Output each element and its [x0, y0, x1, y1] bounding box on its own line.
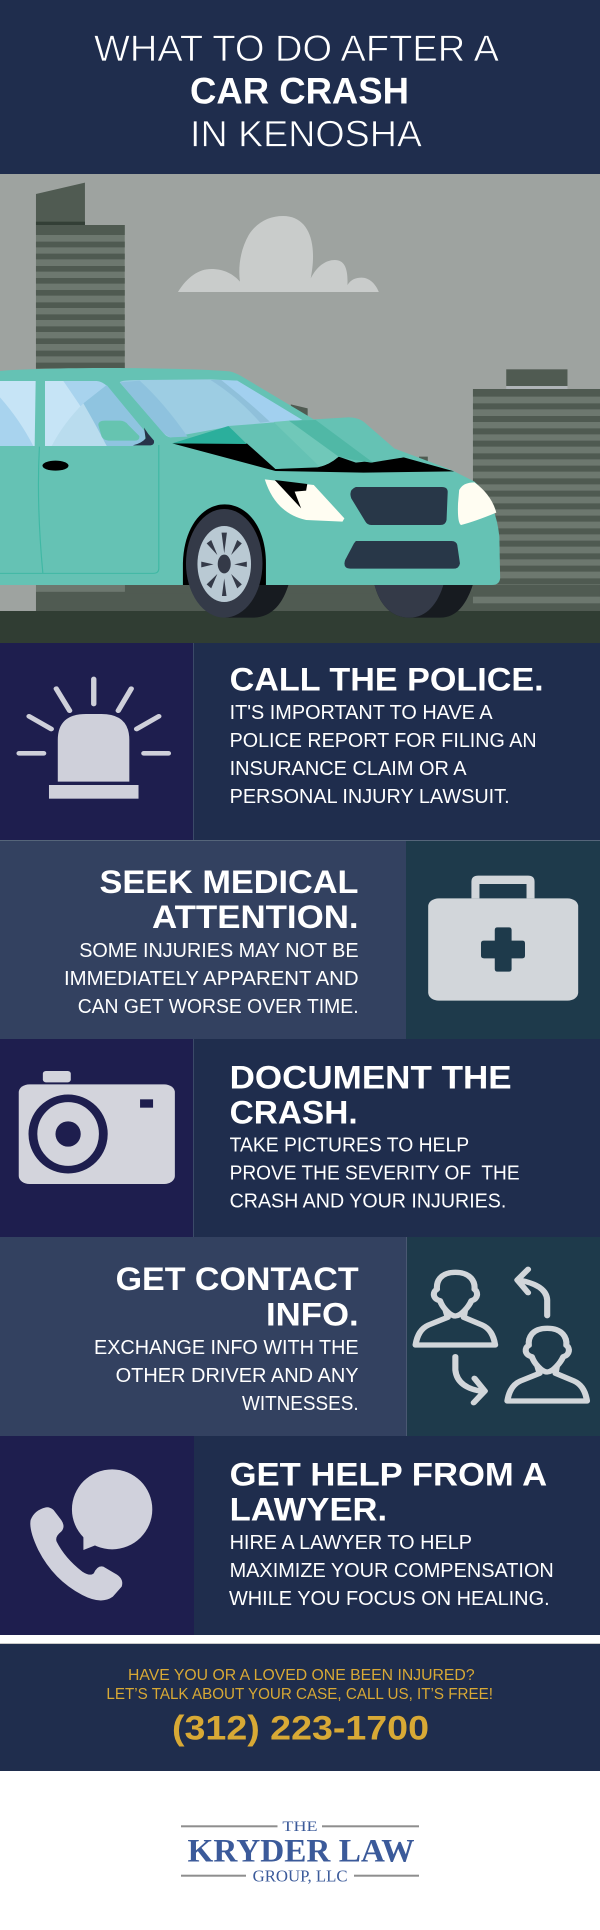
heading and text [230, 1060, 520, 1213]
logo: the kryder law group: KRYDER LAW [188, 1834, 414, 1870]
heading and text [230, 662, 544, 808]
heading and text [229, 1457, 554, 1610]
logo: the kryder law group [181, 1819, 419, 1886]
heading and text: MAXIMIZE YOUR COMPENSATION [230, 1560, 554, 1582]
heading and text [64, 864, 359, 1018]
icon: siren [19, 679, 168, 799]
heading and text: WITNESSES. [242, 1393, 359, 1415]
heading and text: OTHER DRIVER AND ANY [116, 1365, 359, 1387]
heading and text: TAKE PICTURES TO HELP [230, 1135, 469, 1157]
heading and text: DOCUMENT THE [230, 1060, 512, 1096]
heading and text: INFO. [266, 1297, 359, 1333]
logo: the kryder law group: THE [282, 1819, 318, 1835]
panel: get contact info [0, 1237, 600, 1436]
icon: first aid kit [428, 876, 578, 1001]
heading and text: WHILE YOU FOCUS ON HEALING. [229, 1588, 550, 1610]
heading and text: GET CONTACT [116, 1261, 359, 1297]
heading and text: INSURANCE CLAIM OR A [230, 758, 467, 780]
heading and text: CRASH. [230, 1095, 358, 1131]
title: IN KENOSHA [190, 114, 422, 155]
crumpled hood [172, 417, 454, 473]
title: WHAT TO DO AFTER A [94, 28, 499, 69]
windshield [120, 379, 302, 437]
heading and text: EXCHANGE INFO WITH THE [94, 1337, 359, 1359]
cloud [178, 216, 379, 292]
call to action text [106, 1667, 493, 1703]
heading and text: IMMEDIATELY APPARENT AND [64, 968, 359, 990]
heading and text: PROVE THE SEVERITY OF THE [230, 1163, 520, 1185]
call to action footer [0, 1643, 600, 1771]
panel: get help from a lawyer [0, 1436, 600, 1635]
illustration: crashed car in city [0, 174, 600, 644]
panel: call the police [0, 643, 600, 840]
building: right block [291, 369, 600, 603]
title [94, 28, 499, 155]
panel: document the crash [0, 1039, 600, 1237]
heading and text: PERSONAL INJURY LAWSUIT. [230, 786, 510, 808]
door lines and handle [0, 445, 159, 573]
car body [0, 368, 500, 585]
header panel [0, 0, 600, 174]
heading and text: LAWYER. [230, 1492, 387, 1528]
title: CAR CRASH [190, 71, 409, 112]
icon: exchange contacts [416, 1269, 587, 1403]
heading and text: CALL THE POLICE. [230, 662, 544, 698]
street band [0, 585, 600, 644]
icon: camera [19, 1071, 175, 1184]
call to action text: HAVE YOU OR A LOVED ONE BEEN INJURED? [128, 1667, 475, 1684]
heading and text: IT'S IMPORTANT TO HAVE A [230, 702, 493, 724]
panel: seek medical attention [0, 840, 600, 1039]
icon: phone and speech bubble [30, 1469, 152, 1600]
headlights [265, 479, 496, 525]
front wheel [183, 504, 266, 618]
heading and text [94, 1261, 359, 1415]
grilles [344, 487, 460, 569]
heading and text: GET HELP FROM A [230, 1457, 547, 1493]
phone number: (312) 223-1700 [172, 1709, 429, 1747]
call to action text: LET’S TALK ABOUT YOUR CASE, CALL US, IT’S FREE! [106, 1686, 493, 1703]
heading and text: SOME INJURIES MAY NOT BE [79, 940, 359, 962]
heading and text: HIRE A LAWYER TO HELP [230, 1532, 472, 1554]
heading and text: CAN GET WORSE OVER TIME. [78, 996, 359, 1018]
car [0, 368, 500, 618]
heading and text: CRASH AND YOUR INJURIES. [230, 1191, 506, 1213]
heading and text: POLICE REPORT FOR FILING AN [230, 730, 537, 752]
heading and text: SEEK MEDICAL [100, 864, 358, 900]
side windows [0, 381, 154, 446]
logo: the kryder law group: GROUP, LLC [253, 1867, 348, 1886]
building: left tower [36, 183, 125, 592]
heading and text: ATTENTION. [152, 899, 359, 935]
